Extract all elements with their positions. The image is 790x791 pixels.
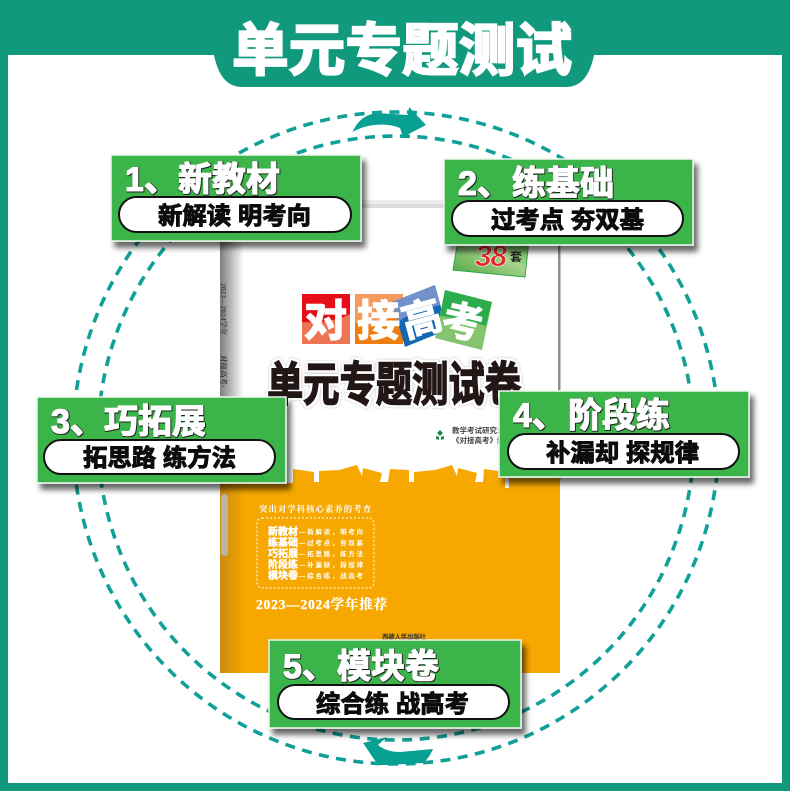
- card 5 pill: 综合练 战高考: [316, 691, 469, 718]
- editor lines: 《对接高考》编写: [452, 435, 512, 445]
- card 5: [269, 640, 521, 728]
- title tab: [214, 19, 594, 87]
- card 1 pill: [119, 197, 351, 232]
- dashed features box: [257, 518, 374, 588]
- orange cover band: [220, 465, 560, 673]
- dashed features box: 巧拓展: [268, 547, 298, 560]
- logo: 对接高考: 高: [397, 293, 447, 346]
- card 3: 巧拓展: [104, 403, 206, 441]
- book series badge: 38: [475, 240, 507, 273]
- card 2: 练基础: [512, 165, 614, 203]
- publisher logo: [436, 430, 444, 440]
- card 3 pill: 拓思路 练方法: [83, 444, 236, 472]
- card 3: 3、: [51, 403, 104, 441]
- card 1 heading: 新教材: [178, 161, 280, 199]
- publisher: 西藏人民出版社: [382, 632, 426, 641]
- book cover: [219, 200, 560, 673]
- dashed features box: 新教材: [268, 525, 298, 538]
- book series badge: 套: [510, 249, 522, 264]
- book series badge: [453, 240, 529, 277]
- card 4 pill: [508, 434, 739, 469]
- logo: 对接高考: 接: [357, 298, 400, 346]
- spine label: [221, 494, 228, 556]
- cover tagline: 突出对学科核心素养的考查: [259, 504, 372, 514]
- dashed features box: —综合练，战高考: [299, 571, 364, 580]
- card 2: [444, 159, 693, 245]
- card 4: [499, 391, 749, 477]
- card 1 heading: 1、: [125, 161, 178, 199]
- card 5: 5、: [283, 648, 336, 686]
- card 4 pill: 补漏却 探规律: [546, 440, 699, 467]
- book title: 单元专题测试卷: [267, 358, 521, 411]
- logo: 对接高考: 考: [438, 297, 487, 349]
- card 3: [37, 397, 286, 483]
- spine text: 2023—2024学年: [219, 283, 229, 336]
- card 1 pill: 新解读 明考向: [158, 203, 311, 230]
- card 2 pill: [452, 201, 683, 236]
- title: 单元专题测试: [232, 19, 572, 83]
- card 2 pill: 过考点 夯双基: [491, 207, 644, 234]
- card 4: 阶段练: [568, 397, 670, 435]
- dashed features box: 阶段练: [268, 558, 298, 571]
- editor lines: [452, 425, 512, 445]
- arrow: top: [352, 107, 426, 137]
- spine text: [219, 283, 229, 388]
- dashed features box: 模块卷: [268, 569, 298, 582]
- card 1: [111, 155, 361, 241]
- spine text: 对接高考·: [219, 355, 229, 388]
- card 4: 4、: [513, 397, 566, 435]
- card 5 pill: [278, 685, 509, 719]
- arrow: bottom: [363, 737, 433, 765]
- dashed rings: [73, 112, 719, 764]
- school year: 2023—2024学年推荐: [256, 596, 388, 612]
- logo: 对接高考: [302, 285, 492, 350]
- logo: 对接高考: 对: [304, 298, 347, 346]
- card 2: 2、: [458, 165, 511, 203]
- editor lines: 教学考试研究:: [452, 425, 500, 435]
- dashed features box: —拓思路，练方法: [299, 549, 364, 558]
- dashed features box: 练基础: [268, 536, 298, 549]
- dashed features box: —补漏缺，探规律: [299, 560, 364, 569]
- dashed features box: —过考点，夯双基: [299, 538, 364, 547]
- dashed features box: —新解读，明考向: [299, 527, 363, 536]
- card 5: 模块卷: [337, 648, 439, 686]
- card 3 pill: [44, 440, 275, 474]
